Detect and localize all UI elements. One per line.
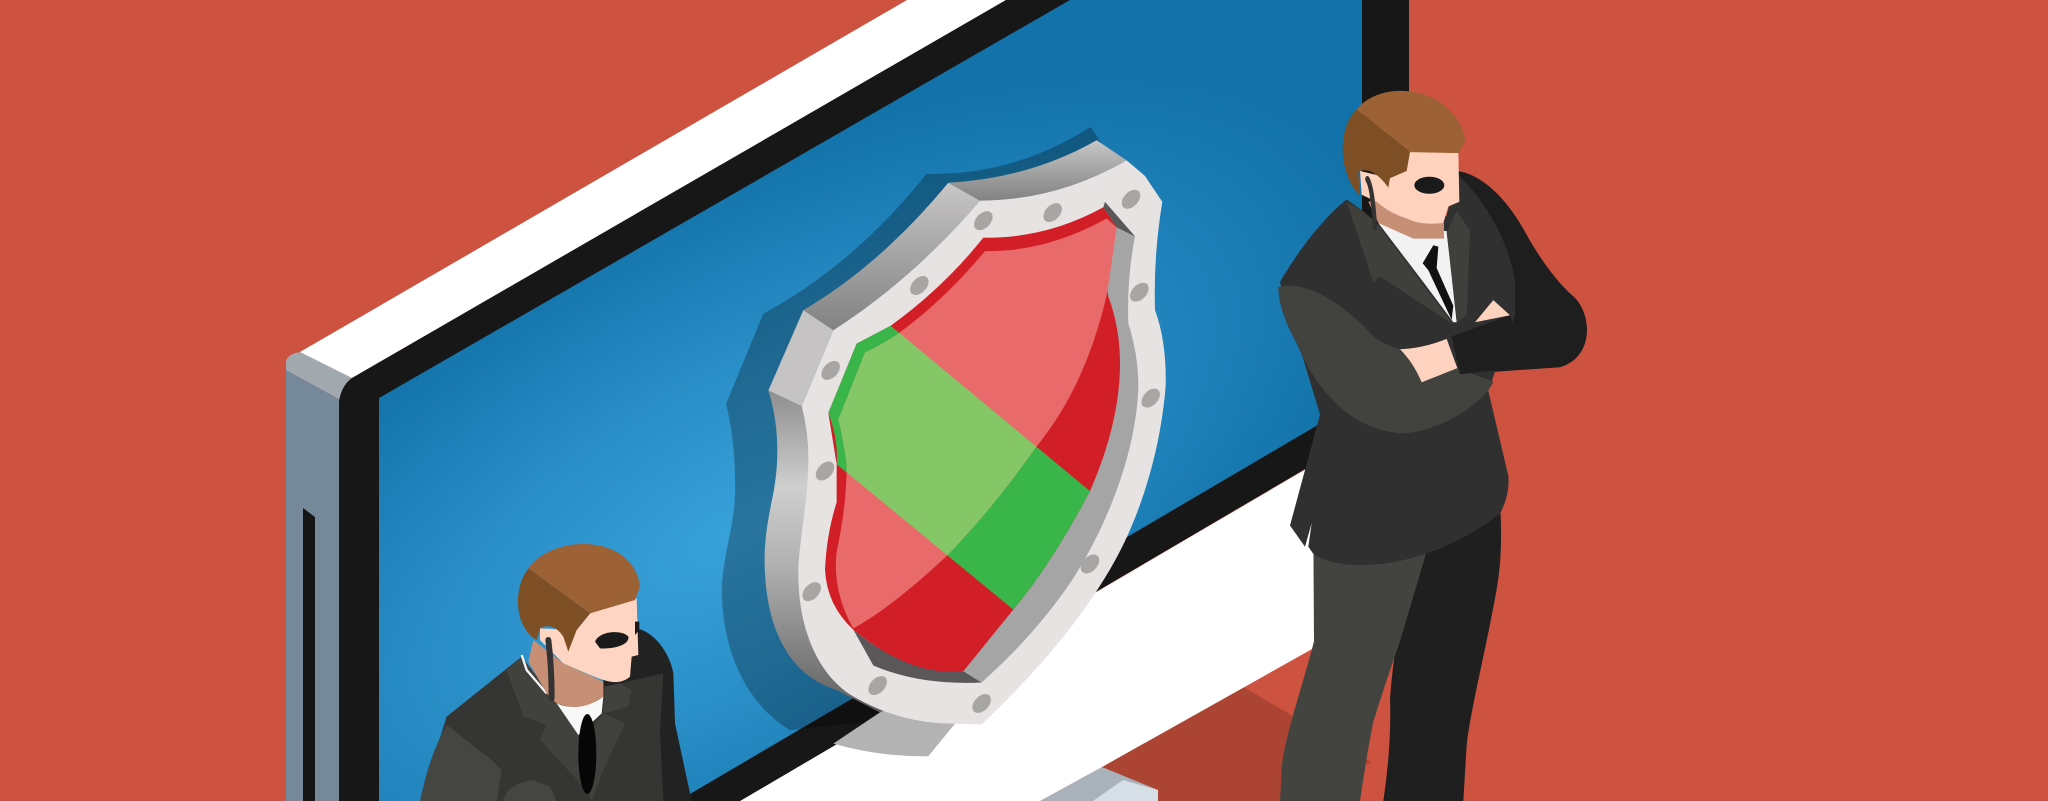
- neck: [528, 640, 603, 710]
- near arm: [1278, 286, 1493, 433]
- shield shadow: [722, 127, 1101, 730]
- monitor side: [286, 370, 339, 801]
- tie: [1423, 245, 1453, 320]
- monitor bezel: [339, 0, 1409, 801]
- sunglasses: [1414, 177, 1444, 194]
- shield green band: [828, 326, 1090, 610]
- tie: [578, 714, 596, 794]
- hair dark: [518, 568, 590, 652]
- jacket: [420, 657, 663, 801]
- lapels: [1347, 202, 1470, 325]
- shield floor reflection: [833, 708, 955, 756]
- seated guard: [420, 544, 692, 801]
- hands: [1400, 300, 1510, 382]
- hair light: [1357, 91, 1466, 153]
- sleeve end: [1452, 315, 1527, 374]
- face: [1360, 150, 1459, 224]
- sunglasses: [595, 632, 628, 648]
- collar line: [522, 655, 547, 693]
- shield red interior: [825, 207, 1120, 672]
- pocket: [503, 780, 557, 801]
- shield: [722, 127, 1166, 756]
- monitor side top edge: [286, 352, 352, 399]
- monitor screen: [379, 0, 1362, 801]
- floor shadow: [1102, 685, 1371, 801]
- monitor side slot: [303, 508, 315, 801]
- earpiece: [548, 640, 552, 698]
- face: [540, 598, 638, 682]
- near shoulder: [420, 725, 502, 801]
- shield rivets: [800, 186, 1162, 717]
- hair light: [528, 544, 640, 613]
- shield recess shadows: [853, 202, 1135, 683]
- monitor: [286, 0, 1409, 801]
- lapels: [507, 657, 632, 801]
- far arm: [1452, 171, 1587, 374]
- illustration: [286, 0, 1587, 801]
- shield sides: [765, 140, 1127, 712]
- monitor base: [740, 455, 1330, 801]
- jacket: [1280, 173, 1515, 565]
- standing guard: [1278, 91, 1587, 801]
- earpiece: [1367, 179, 1375, 228]
- shield glass highlight: [836, 218, 1116, 628]
- shirt: [1378, 223, 1457, 322]
- shirt: [557, 697, 603, 735]
- far leg: [1373, 504, 1501, 801]
- shield recess wall: [963, 202, 1138, 682]
- neck: [1368, 197, 1444, 239]
- monitor stand foot: [1040, 767, 1158, 801]
- shield face rim: [798, 160, 1166, 724]
- monitor top edge: [300, 0, 1006, 378]
- hair dark: [1343, 110, 1410, 196]
- far lens: [635, 622, 639, 635]
- near leg: [1280, 533, 1427, 801]
- far arm: [603, 628, 692, 801]
